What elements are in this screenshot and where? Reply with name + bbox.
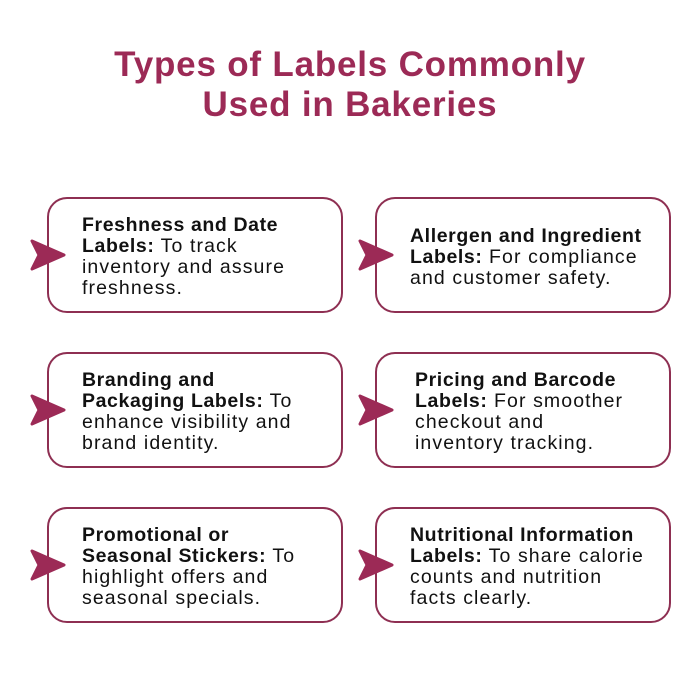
title: Used in Bakeries — [203, 85, 497, 124]
panel: branding: brand identity. — [82, 432, 220, 454]
panel: freshness — [47, 197, 343, 313]
panel: nutritional: Labels: To share calorie — [410, 545, 644, 567]
icon: arrow 4 — [358, 394, 394, 426]
panel: nutritional: facts clearly. — [410, 587, 532, 609]
icon: arrow 3 — [30, 394, 66, 426]
icon: arrow 1 — [30, 240, 66, 270]
panel: branding: Branding and — [82, 369, 215, 391]
icon: arrow 6 — [358, 550, 394, 580]
panel: pricing: inventory tracking. — [415, 432, 594, 454]
panel: promotional: Seasonal Stickers: To — [82, 545, 295, 567]
panel: branding: enhance visibility and — [82, 411, 292, 433]
panel: promotional: seasonal specials. — [82, 587, 261, 609]
icon: arrow 5 — [30, 550, 66, 580]
panel: allergen: and customer safety. — [410, 267, 612, 289]
panel: nutritional: counts and nutrition — [410, 566, 602, 588]
panel: pricing: Labels: For smoother — [415, 390, 623, 412]
panel: promotional: Promotional or — [82, 524, 229, 546]
panel: allergen — [375, 197, 671, 313]
panel: allergen: Labels: For compliance — [410, 246, 638, 268]
panel: allergen: Allergen and Ingredient — [410, 225, 642, 247]
panel: nutritional: Nutritional Information — [410, 524, 634, 546]
panel: freshness: freshness. — [82, 277, 183, 299]
icon: arrow 2 — [358, 240, 394, 270]
title — [114, 45, 586, 124]
title: Types of Labels Commonly — [114, 45, 586, 84]
panel: freshness: Labels: To track — [82, 235, 238, 257]
panel: freshness: Freshness and Date — [82, 214, 278, 236]
panel: branding: Packaging Labels: To — [82, 390, 292, 412]
panel: nutritional — [375, 507, 671, 623]
panel: branding — [47, 352, 343, 468]
panel: pricing: Pricing and Barcode — [415, 369, 616, 391]
panel: freshness: inventory and assure — [82, 256, 285, 278]
panel: promotional: highlight offers and — [82, 566, 268, 588]
panel: promotional — [47, 507, 343, 623]
panel: pricing — [375, 352, 671, 468]
panel: pricing: checkout and — [415, 411, 544, 433]
